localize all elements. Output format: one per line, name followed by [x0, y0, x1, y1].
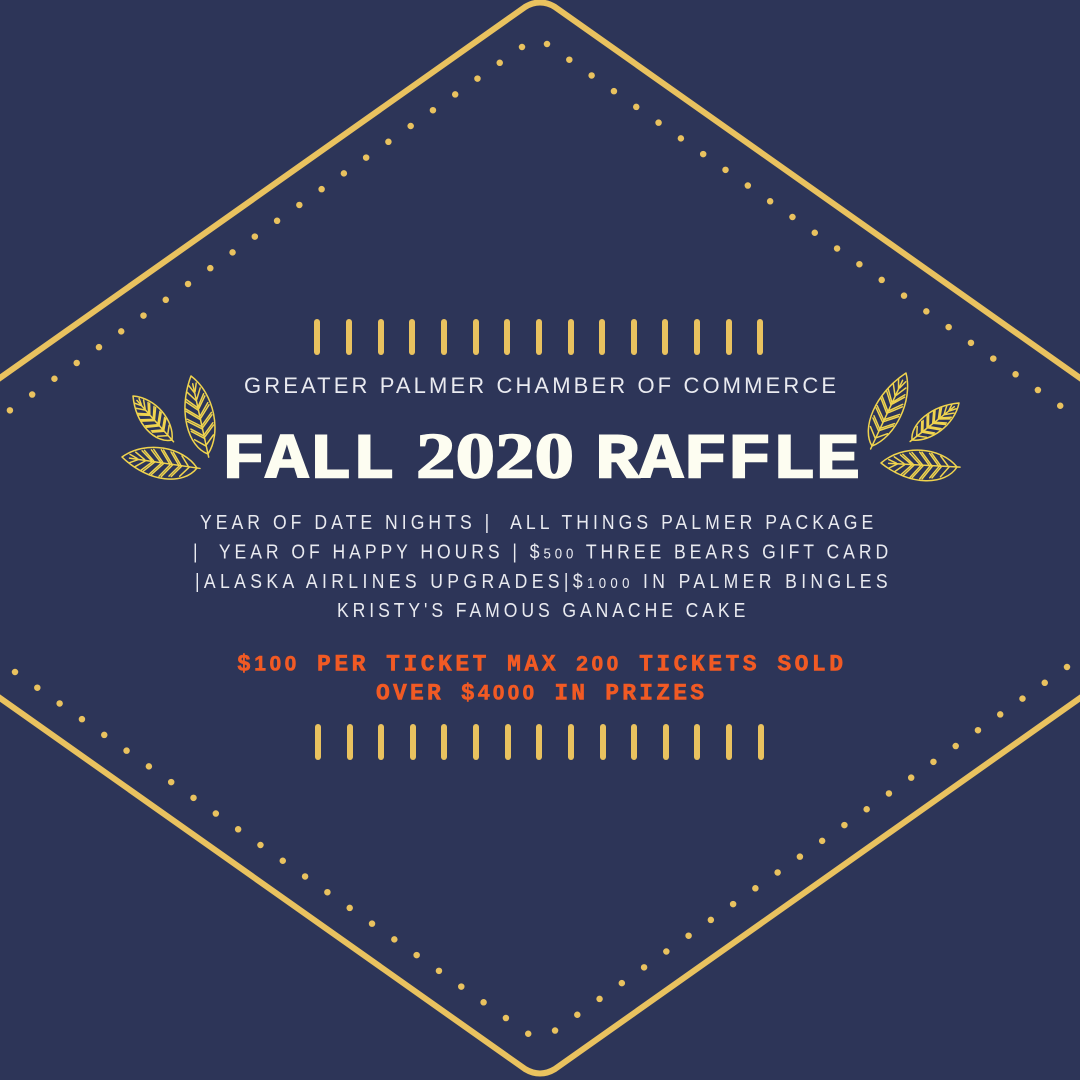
top tick bars	[314, 319, 763, 355]
prize list	[193, 511, 888, 621]
title	[222, 420, 860, 498]
dotted line: bottom left	[15, 672, 530, 1035]
top diamond outline	[0, 2, 1080, 385]
ticket details	[237, 652, 843, 706]
prize list: YEAR OF DATE NIGHTS | ALL THINGS PALMER PACKAGE	[200, 511, 873, 533]
ticket details: $100 PER TICKET MAX 200 TICKETS SOLD	[237, 652, 843, 678]
icon: right leaves	[858, 367, 965, 483]
bottom diamond outline	[0, 691, 1080, 1074]
title: RAFFLE	[595, 426, 860, 498]
organization heading: GREATER PALMER CHAMBER OF COMMERCE	[244, 373, 836, 398]
dotted line: bottom right	[553, 667, 1067, 1032]
prize list: KRISTY'S FAMOUS GANACHE CAKE	[337, 599, 745, 621]
dotted line: top right	[547, 44, 1062, 407]
prize list: | YEAR OF HAPPY HOURS | $ 500 THREE BEARS GIFT CARD	[193, 540, 888, 563]
title: FALL	[222, 426, 395, 498]
ticket details: OVER $4000 IN PRIZES	[376, 680, 704, 706]
icon: left leaves	[120, 373, 222, 484]
prize list: |ALASKA AIRLINES UPGRADES|$ 1000 IN PALMER BINGLES	[195, 570, 888, 592]
title: 2020	[416, 420, 574, 492]
bottom tick bars	[315, 724, 764, 760]
dotted line: top left	[9, 47, 522, 411]
